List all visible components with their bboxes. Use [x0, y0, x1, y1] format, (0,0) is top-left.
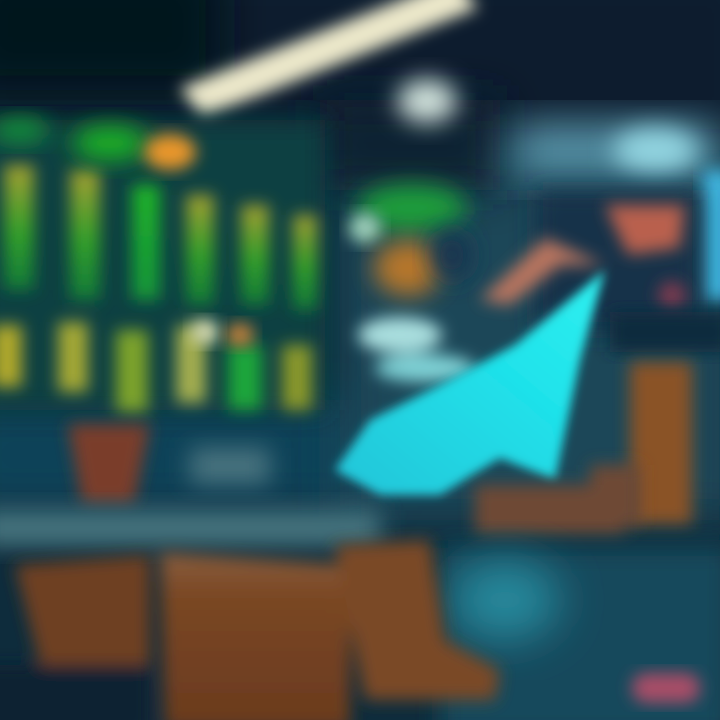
orange highlight — [144, 134, 196, 170]
pale box under panels — [190, 448, 270, 484]
right backdrop: light blue window — [510, 125, 720, 330]
round ceiling lamp — [397, 79, 457, 123]
dark table slab — [610, 312, 720, 352]
green top highlight — [72, 125, 148, 161]
brown column — [630, 362, 692, 524]
brown floor boxes — [475, 465, 640, 535]
plant pot — [68, 424, 150, 504]
pink badge — [632, 673, 700, 703]
ceiling light — [180, 0, 478, 118]
pale table band — [0, 510, 380, 546]
orange-pink figure shapes — [480, 205, 686, 309]
green and yellow wall panels — [0, 118, 325, 412]
cyan arrow — [335, 270, 605, 495]
floor — [440, 548, 720, 720]
white splash — [358, 317, 475, 382]
figure: green and orange foliage — [349, 184, 472, 296]
brown stools — [0, 540, 500, 720]
